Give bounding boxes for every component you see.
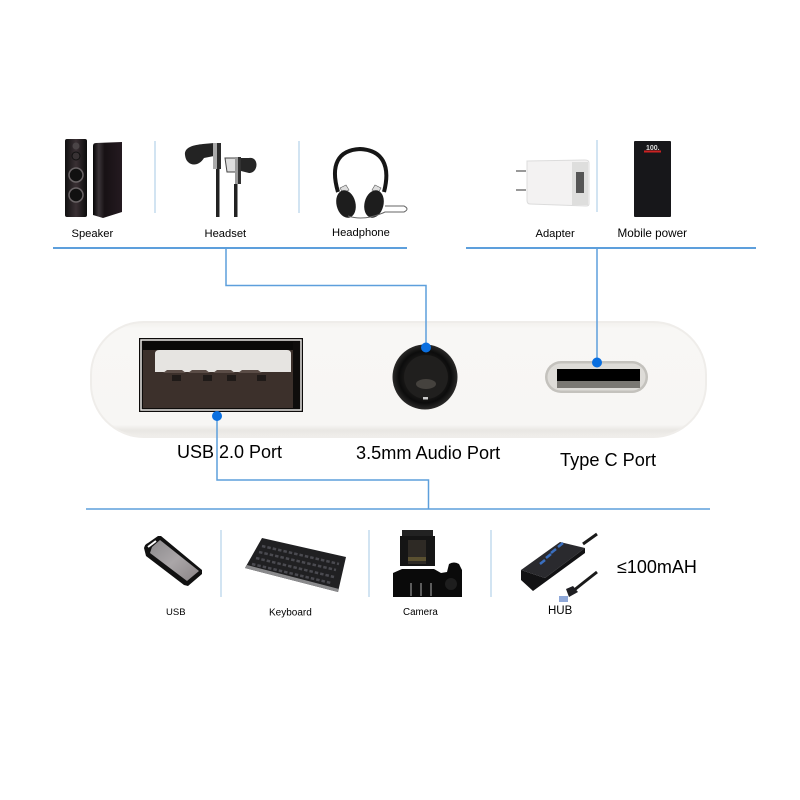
device: adapter body <box>90 321 707 438</box>
text: camera label: Camera <box>403 607 438 618</box>
icon: usb hub <box>521 534 597 602</box>
dot: usb port <box>212 411 222 421</box>
icon: keyboard <box>245 538 346 592</box>
icon: speaker <box>65 139 122 218</box>
panel: usb peripherals (bottom) <box>144 530 697 618</box>
dot: type c port <box>592 358 602 368</box>
connector: audio port to audio devices <box>226 248 426 348</box>
icon: mobile power bank <box>634 141 671 217</box>
icon: headphones <box>333 149 407 220</box>
text: hub label: HUB <box>548 605 573 617</box>
text: adapter label: Adapter <box>536 228 575 240</box>
item dividers <box>155 140 597 597</box>
text: usb 2.0 port label: USB 2.0 Port <box>177 442 282 462</box>
text: headset label: Headset <box>204 228 247 240</box>
text: speaker label: Speaker <box>72 228 113 240</box>
3.5mm audio port <box>392 344 458 410</box>
text: type c port label: Type C Port <box>560 450 656 470</box>
top right bracket line <box>466 247 756 249</box>
connector lines <box>53 248 756 509</box>
dot: audio port <box>421 342 431 352</box>
usb 2.0 port <box>139 338 303 412</box>
text: current limit: ≤100mAH <box>617 557 697 577</box>
text: usb label: USB <box>166 607 186 618</box>
icon: camera <box>393 530 462 597</box>
text: headphone label: Headphone <box>332 227 390 239</box>
icon: usb flash drive <box>144 536 202 586</box>
connector: type c port to power devices <box>596 248 598 362</box>
bottom bracket line <box>86 508 710 510</box>
top left bracket line <box>53 247 407 249</box>
text: audio port label: 3.5mm Audio Port <box>356 443 500 463</box>
type c port <box>545 361 648 393</box>
icon: headset earphones <box>185 143 256 217</box>
text: keyboard label: Keyboard <box>269 608 312 618</box>
connector: usb port to peripherals <box>217 416 428 509</box>
panel: audio devices (top left) <box>65 139 407 240</box>
icon: mobile power bank: 100. <box>646 145 660 152</box>
text: mobile power label: Mobile power <box>618 227 687 240</box>
icon: power adapter <box>516 160 589 206</box>
panel: power devices (top right) <box>516 141 687 240</box>
